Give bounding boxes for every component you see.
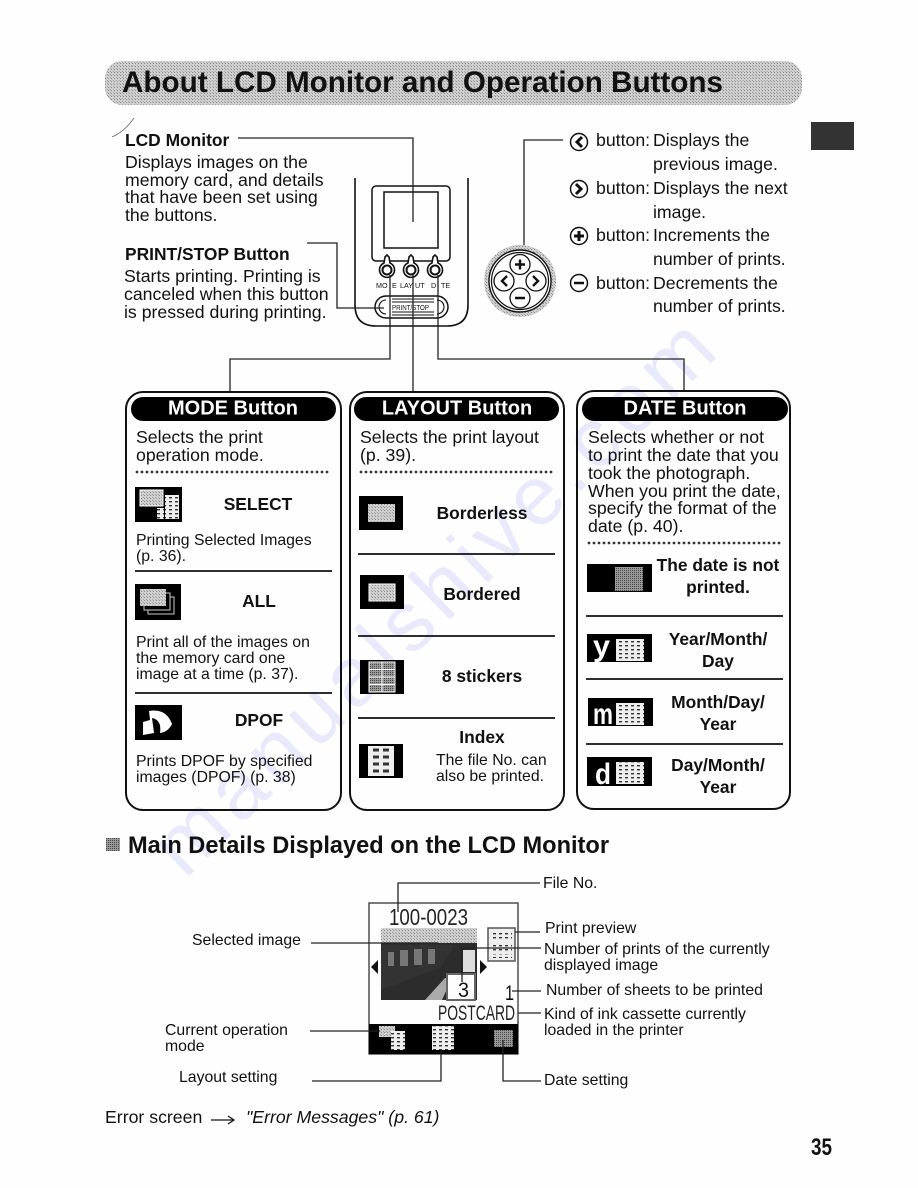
error reference: "Error Messages" (p. 61): [246, 1107, 439, 1127]
left labels: [165, 932, 301, 1086]
right labels: [543, 875, 770, 1089]
sheet count: 1: [505, 982, 514, 1005]
button labels: UT: [415, 281, 425, 290]
icon: no date: [587, 564, 652, 592]
header: DATE: [582, 397, 788, 421]
copies box: [447, 974, 475, 1002]
button labels: D: [431, 281, 436, 290]
arrow: [211, 1116, 234, 1124]
icon: month first: m: [593, 698, 613, 731]
button legend: [570, 130, 788, 316]
LCD monitor description: memory card, and details: [125, 170, 324, 190]
icon: month first: [588, 698, 653, 731]
button labels: [376, 281, 450, 290]
icon: year first: y: [593, 630, 610, 663]
Borderless label: Borderless: [437, 503, 527, 523]
left labels: Selected image: [192, 932, 301, 949]
status bar: [369, 1024, 518, 1054]
legend text: number of prints.: [653, 249, 786, 269]
legend text: button:: [596, 130, 650, 150]
Index text: [436, 752, 547, 785]
icon: minus button: [570, 274, 588, 292]
right labels: Kind of ink cassette currently: [544, 1006, 746, 1023]
LCD monitor description: that have been set using: [125, 187, 318, 207]
cassette type: POSTCARD: [438, 1002, 515, 1025]
icon: right button: [570, 180, 588, 198]
section heading: Main Details Displayed on the LCD Monitor: [128, 832, 609, 859]
file number: 100-0023: [389, 904, 468, 930]
left labels: Layout setting: [179, 1069, 277, 1086]
button labels: LAY: [400, 281, 413, 290]
title banner: [105, 61, 802, 105]
panel: DATE button: [577, 391, 790, 809]
left labels: Current operation: [165, 1022, 288, 1039]
LCD screen outline: [372, 186, 450, 261]
title: About LCD Monitor and Operation Buttons: [122, 66, 723, 99]
legend text: previous image.: [653, 154, 778, 174]
DATE intro: Selects whether or not: [588, 427, 764, 447]
DATE intro: date (p. 40).: [588, 516, 683, 536]
three buttons: [380, 255, 443, 277]
Index text: The file No. can: [436, 752, 547, 769]
DPOF text: [136, 753, 312, 786]
MODE intro: Selects the print: [136, 427, 263, 447]
LCD monitor description: Displays images on the: [125, 152, 308, 172]
directional pad: [484, 245, 556, 317]
Month/Day/Year label: Month/Day/: [671, 692, 765, 712]
Month/Day/Year label: [671, 692, 765, 734]
right labels: Number of prints of the currently: [544, 941, 770, 958]
icon: select: [135, 487, 182, 522]
icon: 8 stickers: [360, 660, 404, 694]
leader lines: LCD screen: [310, 883, 541, 1081]
MODE intro: operation mode.: [136, 445, 264, 465]
icon: plus button: [570, 228, 588, 244]
left labels: mode: [165, 1038, 205, 1055]
pen mark: [112, 118, 134, 137]
Index text: also be printed.: [436, 768, 544, 785]
legend text: button:: [596, 273, 650, 293]
PRINT/STOP description: canceled when this button: [124, 284, 329, 304]
icon: DPOF: [135, 705, 182, 740]
Index label: Index: [459, 727, 505, 747]
legend text: Increments the: [653, 225, 770, 245]
page number: 35: [811, 1134, 832, 1161]
button labels: TE: [441, 281, 450, 290]
icon: index: [359, 744, 403, 778]
Bordered label: Bordered: [443, 584, 521, 604]
LCD screen example: [369, 903, 518, 1054]
error reference: [105, 1107, 439, 1127]
PRINT/STOP description: [124, 244, 329, 322]
legend text: [596, 130, 788, 316]
SELECT label: SELECT: [224, 494, 293, 514]
DATE intro: [588, 427, 781, 536]
watermark: manualshive.com: [132, 300, 733, 893]
PRINT/STOP description: is pressed during printing.: [124, 302, 327, 322]
DATE intro: to print the date that you: [588, 445, 779, 465]
PRINT/STOP button: PRINT/STOP: [392, 303, 429, 312]
MODE intro: [136, 427, 264, 465]
LAYOUT intro: [360, 427, 539, 465]
legend text: button:: [596, 178, 650, 198]
legend text: image.: [653, 202, 706, 222]
legend text: Displays the: [653, 130, 750, 150]
SELECT text: Printing Selected Images: [136, 532, 312, 549]
PRINT/STOP description: PRINT/STOP Button: [125, 244, 290, 264]
LAYOUT intro: Selects the print layout: [360, 427, 539, 447]
LCD monitor description: [125, 130, 324, 225]
header: DATE: DATE Button: [624, 398, 746, 420]
Day/Month/Year label: Day/Month/: [671, 755, 765, 775]
icon: bordered: [360, 575, 404, 609]
8 stickers label: 8 stickers: [442, 666, 522, 686]
SELECT text: [136, 532, 312, 565]
DPOF label: DPOF: [235, 710, 283, 730]
icon: borderless: [359, 496, 403, 530]
SELECT text: (p. 36).: [136, 548, 186, 565]
leader lines: top diagram: [230, 138, 684, 392]
Year/Month/Day label: [669, 629, 767, 671]
LCD monitor description: LCD Monitor: [125, 130, 230, 150]
photo: [381, 928, 477, 1000]
Month/Day/Year label: Year: [700, 714, 737, 734]
panel: LAYOUT button: [350, 392, 564, 810]
legend text: Decrements the: [653, 273, 778, 293]
right labels: Print preview: [545, 920, 637, 937]
header: LAYOUT: LAYOUT Button: [382, 398, 532, 420]
LAYOUT intro: (p. 39).: [360, 445, 416, 465]
ALL label: ALL: [242, 591, 276, 611]
icon: left button: [570, 134, 588, 150]
icon: day first: [587, 757, 652, 791]
Year/Month/Day label: Year/Month/: [669, 629, 767, 649]
header: LAYOUT: [354, 397, 559, 421]
DATE intro: specify the format of the: [588, 498, 777, 518]
chapter tab: [811, 122, 854, 150]
print preview icon: [488, 928, 515, 961]
icon: all: [135, 584, 181, 620]
legend text: number of prints.: [653, 296, 786, 316]
button labels: E: [392, 281, 397, 290]
panel: MODE button: [126, 392, 341, 810]
ALL text: image at a time (p. 37).: [136, 666, 298, 683]
DPOF text: Prints DPOF by specified: [136, 753, 312, 770]
LCD monitor description: the buttons.: [125, 205, 217, 225]
Year/Month/Day label: Day: [702, 651, 734, 671]
PRINT/STOP description: Starts printing. Printing is: [124, 266, 321, 286]
legend text: Displays the next: [653, 178, 788, 198]
header: MODE: [131, 397, 336, 421]
legend text: button:: [596, 225, 650, 245]
no date label: The date is not: [657, 555, 780, 575]
printer control panel diagram: [355, 178, 468, 326]
right labels: loaded in the printer: [544, 1022, 684, 1039]
arrows: [371, 960, 487, 974]
right labels: File No.: [543, 875, 597, 892]
icon: day first: d: [595, 758, 611, 791]
DATE intro: took the photograph.: [588, 463, 750, 483]
icon: year first: [587, 630, 652, 663]
right labels: Number of sheets to be printed: [546, 982, 763, 999]
copies box: 3: [458, 979, 469, 1002]
error reference: Error screen: [105, 1107, 202, 1127]
right labels: Date setting: [544, 1072, 628, 1089]
Day/Month/Year label: Year: [700, 777, 737, 797]
ALL text: Print all of the images on: [136, 634, 310, 651]
no date label: [657, 555, 780, 597]
no date label: printed.: [686, 577, 750, 597]
DATE intro: When you print the date,: [588, 481, 781, 501]
Day/Month/Year label: [671, 755, 765, 797]
PRINT/STOP button: [375, 296, 448, 318]
button labels: MO: [376, 281, 388, 290]
header: MODE: MODE Button: [168, 398, 298, 420]
ALL text: [136, 634, 310, 683]
DPOF text: images (DPOF) (p. 38): [136, 769, 296, 786]
ALL text: the memory card one: [136, 650, 285, 667]
right labels: displayed image: [544, 957, 658, 974]
